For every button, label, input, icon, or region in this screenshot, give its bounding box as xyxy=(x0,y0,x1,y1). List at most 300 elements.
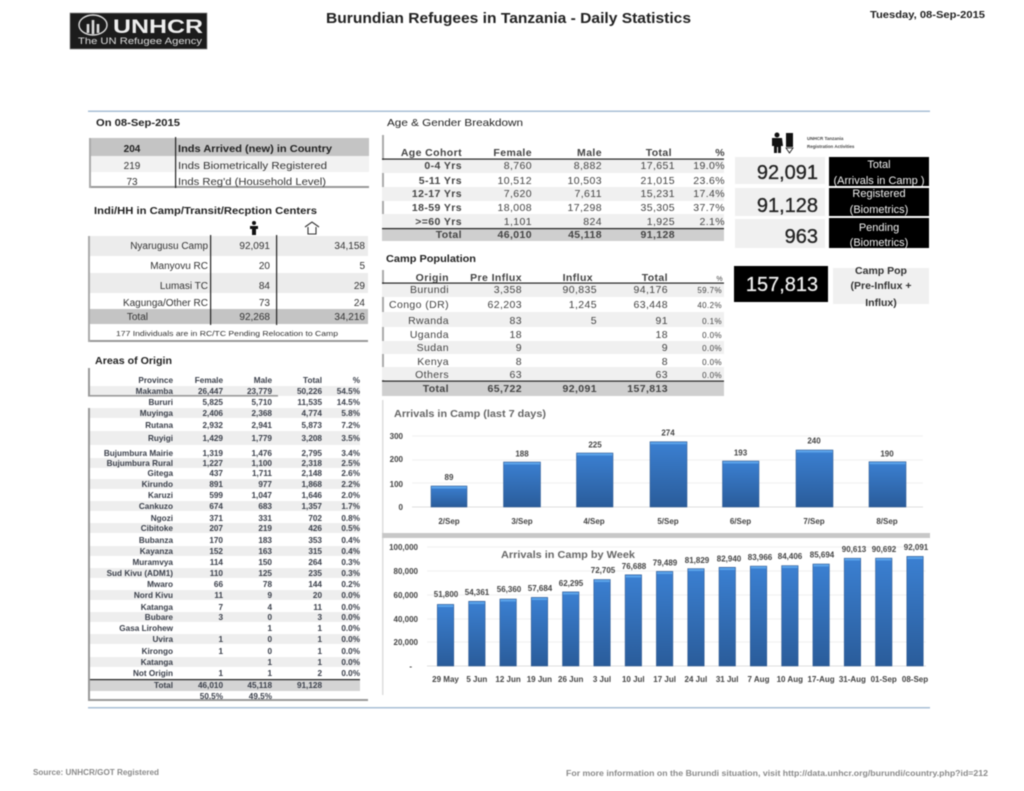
origin table: 2.6% xyxy=(341,469,361,478)
camp table xyxy=(88,235,368,342)
origin table: 0.4% xyxy=(341,547,361,556)
origin table: 1,047 xyxy=(252,491,272,500)
age table: 17.4% xyxy=(693,188,725,200)
camp population table: 18 xyxy=(656,329,668,341)
value labels: 193 xyxy=(734,448,748,458)
origin table: 0.4% xyxy=(341,536,361,545)
origin table: Bujumbura Mairie xyxy=(104,449,173,458)
camp population table: 9 xyxy=(516,342,522,354)
icon: house xyxy=(305,222,319,234)
origin table: Sud Kivu (ADM1) xyxy=(107,569,173,578)
camp population table: 9 xyxy=(662,342,668,354)
origin table: 0.0% xyxy=(341,624,361,633)
title: Burundian Refugees in Tanzania - Daily Statistics xyxy=(326,10,691,27)
value labels: 240 xyxy=(807,436,821,446)
chart: arrivals by week xyxy=(382,538,929,695)
origin table: 50,226 xyxy=(297,387,322,396)
camp population table: 0.0% xyxy=(702,371,722,380)
stat: total arrivals xyxy=(735,157,929,187)
age table: % xyxy=(715,147,725,159)
origin table: 23,779 xyxy=(247,387,272,396)
panel: individuals and households in camp xyxy=(88,206,368,342)
camp population table: 65,722 xyxy=(487,383,522,395)
camp population table: 0.1% xyxy=(702,317,722,326)
value labels: 79,489 xyxy=(653,558,678,568)
stat: registered: 91,128 xyxy=(757,195,818,217)
heading: areas of origin: Areas of Origin xyxy=(95,355,172,367)
age table: 19.0% xyxy=(693,160,725,172)
camp table: Kagunga/Other RC xyxy=(123,298,208,309)
camp population table: 63 xyxy=(510,369,522,381)
origin table: 977 xyxy=(258,480,272,489)
age table: 46,010 xyxy=(497,229,532,241)
small caption: UNHCR Tanzania xyxy=(807,136,844,141)
age table: 37.7% xyxy=(693,202,725,214)
camp population table: Others xyxy=(415,369,449,381)
origin table: 4,774 xyxy=(302,409,322,418)
origin table: 1 xyxy=(317,635,322,644)
origin table: 1.7% xyxy=(341,502,361,511)
origin table: 144 xyxy=(308,580,322,589)
origin table: Rutana xyxy=(145,421,173,430)
origin table: 49.5% xyxy=(249,692,273,701)
origin table: 7.2% xyxy=(341,421,361,430)
logo: UNHCR xyxy=(70,13,207,49)
stat: registered xyxy=(735,188,929,217)
week labels: 17-Aug xyxy=(808,675,835,684)
origin table: 264 xyxy=(308,558,322,567)
small caption xyxy=(807,136,855,149)
value labels: 274 xyxy=(661,428,675,438)
age table: >=60 Yrs xyxy=(415,216,462,228)
age table: 35,305 xyxy=(640,202,675,214)
chart title: Arrivals in Camp (last 7 days) xyxy=(394,409,546,420)
age table: 8,760 xyxy=(504,160,532,172)
origin table: 437 xyxy=(209,469,223,478)
y axis labels: 100,000 xyxy=(389,543,419,552)
origin table: 54.5% xyxy=(337,387,361,396)
origin table: 2.2% xyxy=(341,480,361,489)
origin table: 0.5% xyxy=(341,524,361,533)
value labels: 51,800 xyxy=(434,590,459,599)
value labels: 92,091 xyxy=(904,543,929,552)
origin table: Ngozi xyxy=(151,514,173,523)
camp population table: Origin xyxy=(416,272,449,284)
origin table: 0.0% xyxy=(341,591,361,600)
camp population table: 8 xyxy=(662,356,668,368)
origin table: 5.8% xyxy=(341,409,361,418)
origin table: Province xyxy=(138,376,173,385)
origin table: 0.8% xyxy=(341,514,361,523)
age table: 8,882 xyxy=(574,160,602,172)
age table: 2.1% xyxy=(699,216,725,228)
footer: source: Source: UNHCR/GOT Registered xyxy=(33,768,159,777)
bars xyxy=(437,556,923,666)
footer: more information: For more information on the Burundi situation, visit http://data.unhcr.org/burundi/country.php?id=212 xyxy=(566,769,989,778)
camp table: Total xyxy=(127,312,148,323)
age table: 10,503 xyxy=(567,175,602,187)
stat: camp population xyxy=(734,265,929,309)
origin table: 2,406 xyxy=(202,409,223,418)
camp population table: 5 xyxy=(591,315,597,327)
panel: key figures xyxy=(734,132,929,309)
logo: UNHCR: The UN Refugee Agency xyxy=(78,36,203,46)
value labels xyxy=(445,428,894,482)
camp population table xyxy=(382,270,724,396)
y axis labels xyxy=(389,543,419,671)
camp population table: 8 xyxy=(516,356,522,368)
week labels: 29 May xyxy=(432,675,459,684)
origin table: 163 xyxy=(258,547,272,556)
week labels: 7 Aug xyxy=(748,675,770,684)
camp table: 73 xyxy=(259,298,270,309)
origin table: 674 xyxy=(209,502,223,511)
value labels: 83,966 xyxy=(748,553,773,562)
camp table: 24 xyxy=(354,298,365,309)
origin table: 1 xyxy=(267,624,272,633)
age table: 12-17 Yrs xyxy=(412,188,462,200)
origin table: Karuzi xyxy=(148,491,173,500)
camp population table: 62,203 xyxy=(487,299,522,311)
value labels: 225 xyxy=(588,440,602,450)
week labels: 10 Aug xyxy=(777,675,803,684)
stat: total arrivals: Total xyxy=(867,159,891,171)
summary table: Inds Biometrically Registered xyxy=(178,161,327,172)
value labels: 190 xyxy=(880,450,894,458)
origin table: 599 xyxy=(209,491,223,500)
value labels: 90,692 xyxy=(872,545,897,554)
origin table: Bubanza xyxy=(139,536,173,545)
camp population table: Kenya xyxy=(417,356,449,368)
y axis labels: 300 xyxy=(390,432,404,441)
origin table: 371 xyxy=(209,514,223,523)
stat: camp population: 157,813 xyxy=(746,274,818,296)
origin table: 315 xyxy=(308,547,322,556)
heading: on date: On 08-Sep-2015 xyxy=(96,118,180,129)
y axis labels: 40,000 xyxy=(394,615,419,624)
value labels: 84,406 xyxy=(778,552,803,561)
origin table: 1,357 xyxy=(302,502,322,511)
value labels: 188 xyxy=(515,450,529,458)
date labels xyxy=(438,517,898,526)
summary table: 73 xyxy=(126,177,138,188)
value labels: 89 xyxy=(445,473,454,482)
age table: 17,298 xyxy=(567,202,602,214)
origin table: 1,779 xyxy=(252,434,272,443)
bar highlights xyxy=(438,557,923,607)
age table: 18-59 Yrs xyxy=(412,202,462,214)
date labels: 3/Sep xyxy=(511,517,533,526)
value labels: 90,613 xyxy=(842,545,867,554)
origin table: 20 xyxy=(313,591,322,600)
age table: 1,925 xyxy=(647,216,675,228)
origin table: 1,476 xyxy=(252,449,272,458)
origin table: Cibitoke xyxy=(141,524,173,533)
y axis labels: 100 xyxy=(390,480,404,489)
origin table: 331 xyxy=(258,514,272,523)
stat: camp population: Camp Pop xyxy=(855,265,907,277)
stat: total arrivals: 92,091 xyxy=(757,162,818,184)
origin table: 45,118 xyxy=(247,681,272,690)
camp population table: Uganda xyxy=(410,329,449,341)
age table: Total xyxy=(646,147,672,159)
camp population table: 90,835 xyxy=(562,284,597,296)
origin table: 1 xyxy=(317,658,322,667)
origin table: Makamba xyxy=(136,387,173,396)
origin table: Katanga xyxy=(141,603,173,612)
age table: Total xyxy=(436,229,462,241)
stat: pending xyxy=(735,218,929,249)
camp population table: 63,448 xyxy=(633,299,668,311)
origin table: Total xyxy=(154,681,173,690)
week labels: 01-Sep xyxy=(871,675,897,684)
origin table: 891 xyxy=(209,480,223,489)
value labels: 56,360 xyxy=(497,585,522,594)
origin table: 5,825 xyxy=(202,398,223,407)
y axis labels: 60,000 xyxy=(394,591,419,600)
value labels: 85,694 xyxy=(810,550,835,560)
origin table: 0.0% xyxy=(341,669,361,678)
value labels: 62,295 xyxy=(559,579,584,588)
week labels: 31 Jul xyxy=(716,675,739,684)
stat: total arrivals: (Arrivals in Camp ) xyxy=(833,175,925,187)
origin table: Total xyxy=(303,376,322,385)
origin table: Uvira xyxy=(153,635,173,644)
week labels: 19 Jun xyxy=(527,675,552,684)
origin table: 114 xyxy=(210,558,223,567)
origin table: 0.0% xyxy=(341,603,361,612)
origin table: 152 xyxy=(209,547,223,556)
origin table: 0.0% xyxy=(341,658,361,667)
origin table: Katanga xyxy=(141,658,173,667)
origin table: Kirongo xyxy=(142,647,173,656)
week labels: 24 Jul xyxy=(685,675,707,684)
y axis labels: 200 xyxy=(390,455,404,464)
origin table: 2,148 xyxy=(302,469,322,478)
value labels: 54,361 xyxy=(465,588,490,597)
origin table: 11 xyxy=(214,591,223,600)
camp population table: 157,813 xyxy=(627,383,668,395)
age table: Male xyxy=(577,147,602,159)
camp table: 34,158 xyxy=(334,241,365,252)
value labels: 76,688 xyxy=(622,562,647,571)
origin table: 3.4% xyxy=(341,449,361,458)
age table: 1,101 xyxy=(504,216,532,228)
origin table: 1,227 xyxy=(202,459,223,468)
week labels: 12 Jun xyxy=(495,675,521,684)
age table: 17,651 xyxy=(640,160,675,172)
camp population table: Total xyxy=(642,272,668,284)
camp population table: 0.0% xyxy=(702,344,722,353)
origin table: 0.0% xyxy=(341,635,361,644)
summary table: Inds Reg'd (Household Level) xyxy=(178,177,326,188)
origin table: Cankuzo xyxy=(139,502,173,511)
camp table: 29 xyxy=(354,281,365,292)
origin table: Kayanza xyxy=(140,547,173,556)
date labels: 4/Sep xyxy=(583,517,605,526)
panel: areas of origin xyxy=(88,355,368,701)
panel: camp population xyxy=(382,253,724,396)
stat: pending: 963 xyxy=(785,226,818,248)
origin table: 78 xyxy=(263,580,272,589)
origin table: Muramvya xyxy=(132,558,173,567)
origin table: 150 xyxy=(258,558,272,567)
origin table: 0 xyxy=(267,613,272,622)
origin table: 5,873 xyxy=(302,421,322,430)
week labels: 08-Sep xyxy=(902,675,928,684)
heading: age and gender: Age & Gender Breakdown xyxy=(387,117,523,129)
camp table: Lumasi TC xyxy=(160,281,208,292)
origin table: Bubare xyxy=(145,613,173,622)
origin table: % xyxy=(353,376,361,385)
origin table: 2,318 xyxy=(302,459,322,468)
bars xyxy=(431,442,906,507)
origin table: 3.5% xyxy=(341,434,361,443)
origin table: 1,100 xyxy=(252,459,272,468)
week labels: 3 Jul xyxy=(593,675,611,684)
camp table: 20 xyxy=(259,261,270,272)
origin table: Ruyigi xyxy=(148,434,173,443)
origin table: 0.0% xyxy=(341,647,361,656)
origin table: Bujumbura Rural xyxy=(107,459,173,468)
y axis labels: 0 xyxy=(399,503,404,512)
origin table: Gitega xyxy=(148,469,173,478)
age table: 5-11 Yrs xyxy=(419,175,462,187)
origin table: 2 xyxy=(317,669,322,678)
camp table: Manyovu RC xyxy=(150,261,208,272)
origin table: 207 xyxy=(209,524,223,533)
y axis labels: 20,000 xyxy=(394,638,419,647)
stat: registered: Registered xyxy=(852,188,906,200)
origin table: 0.3% xyxy=(341,569,361,578)
camp population table: 40.2% xyxy=(697,301,722,310)
origin table: Male xyxy=(254,376,272,385)
age table: 7,611 xyxy=(574,188,602,200)
camp population table: 3,358 xyxy=(494,284,522,296)
origin table: Mwaro xyxy=(147,580,173,589)
logo: UNHCR: UNHCR xyxy=(113,17,203,38)
origin table: 1 xyxy=(317,624,322,633)
origin table: 1 xyxy=(218,669,223,678)
camp population table: 1,245 xyxy=(569,299,597,311)
stat: pending: (Biometrics) xyxy=(850,237,908,249)
week labels: 31-Aug xyxy=(839,675,866,684)
date: Tuesday, 08-Sep-2015 xyxy=(870,10,985,21)
camp population table: Influx xyxy=(563,272,593,284)
age table: 23.6% xyxy=(693,175,725,187)
camp population table: Pre Influx xyxy=(470,272,522,284)
origin table: 110 xyxy=(210,569,223,578)
camp table: Nyarugusu Camp xyxy=(130,241,208,252)
camp population table: 59.7% xyxy=(697,286,722,295)
origin table: 0.0% xyxy=(341,613,361,622)
age table: 10,512 xyxy=(497,175,532,187)
stat: pending: Pending xyxy=(859,222,899,234)
origin table: 1 xyxy=(267,669,272,678)
origin table: 14.5% xyxy=(337,398,361,407)
week labels: 17 Jul xyxy=(653,675,676,684)
origin table: 2.5% xyxy=(341,459,361,468)
date labels: 2/Sep xyxy=(438,517,460,526)
value labels xyxy=(434,543,929,599)
y axis labels: 80,000 xyxy=(394,567,419,576)
date labels: 6/Sep xyxy=(730,517,751,526)
camp table: 5 xyxy=(359,261,365,272)
date labels: 5/Sep xyxy=(657,517,679,526)
y axis labels: - xyxy=(409,662,412,671)
origin table: 3,208 xyxy=(302,434,322,443)
origin table: 2,368 xyxy=(252,409,272,418)
week labels: 5 Jun xyxy=(466,675,487,684)
origin table: 1 xyxy=(267,658,272,667)
origin table: 353 xyxy=(308,536,322,545)
panel: age and gender breakdown xyxy=(382,117,725,241)
origin table: Gasa Lirohew xyxy=(119,624,174,633)
camp population table: 91 xyxy=(656,315,668,327)
camp population table: Total xyxy=(423,383,449,395)
small caption: Registration Activities xyxy=(807,144,855,149)
age table: 21,015 xyxy=(640,175,675,187)
age table: 45,118 xyxy=(568,229,602,241)
origin table: 1,711 xyxy=(252,469,272,478)
camp population table: 92,091 xyxy=(562,383,597,395)
origin table: 2,932 xyxy=(202,421,223,430)
date labels: 8/Sep xyxy=(876,517,898,526)
origin table: 9 xyxy=(267,591,272,600)
summary table: 219 xyxy=(124,161,141,172)
y axis labels xyxy=(390,432,404,512)
icon: person xyxy=(250,221,258,235)
camp population table: 83 xyxy=(510,315,522,327)
origin table: 3 xyxy=(317,613,322,622)
camp population table: 94,176 xyxy=(633,284,668,296)
origin table: 11,535 xyxy=(297,398,322,407)
week labels: 10 Jul xyxy=(622,675,645,684)
origin table: 50.5% xyxy=(200,692,224,701)
panel: daily summary xyxy=(89,118,369,188)
origin table: 4 xyxy=(267,603,272,612)
origin table: 2,941 xyxy=(252,421,272,430)
origin table: 702 xyxy=(308,514,322,523)
heading: camp and transit: Indi/HH in Camp/Transit/Recption Centers xyxy=(94,206,317,217)
value labels: 72,705 xyxy=(591,566,616,575)
chart: arrivals in last 7 days xyxy=(382,400,930,538)
origin table: 0.2% xyxy=(341,580,361,589)
age table: 824 xyxy=(583,216,602,228)
heading: camp population: Camp Population xyxy=(386,253,476,265)
origin table: Nord Kivu xyxy=(134,591,173,600)
origin table: 2.0% xyxy=(341,491,361,500)
origin table: 125 xyxy=(258,569,272,578)
summary table: Inds Arrived (new) in Country xyxy=(178,144,332,155)
age table: Female xyxy=(493,147,532,159)
origin table xyxy=(88,368,368,701)
stat: camp population: Influx) xyxy=(865,297,897,309)
value labels: 82,940 xyxy=(717,554,742,564)
origin table: 1 xyxy=(218,647,223,656)
bar highlights xyxy=(432,442,906,488)
date labels: 7/Sep xyxy=(803,517,825,526)
origin table: 1 xyxy=(317,647,322,656)
camp population table: Sudan xyxy=(417,342,449,354)
age table: 15,231 xyxy=(640,188,675,200)
origin table: 1,429 xyxy=(202,434,223,443)
origin table: 5,710 xyxy=(252,398,272,407)
camp population table: % xyxy=(716,276,723,283)
origin table: 91,128 xyxy=(297,681,322,690)
stat: registered: (Biometrics) xyxy=(850,204,908,216)
origin table: 3 xyxy=(218,613,223,622)
